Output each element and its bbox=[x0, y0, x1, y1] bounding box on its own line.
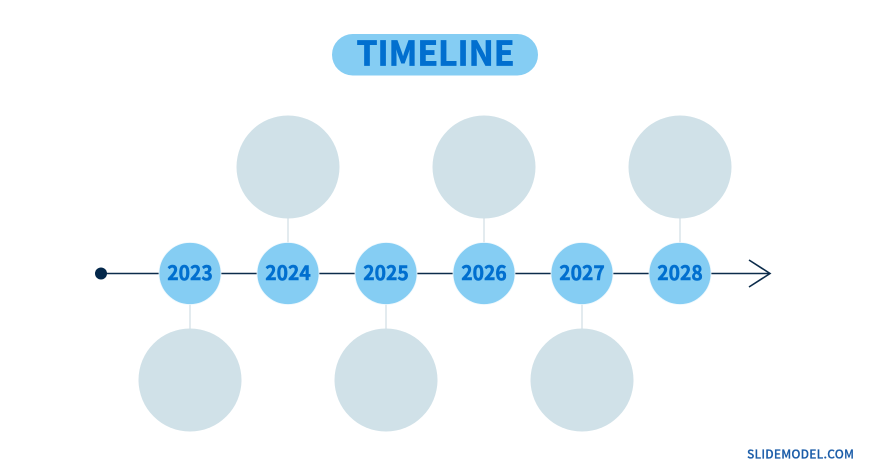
year node 2024 bbox=[257, 242, 319, 304]
placeholder circle 2028 bbox=[628, 116, 732, 218]
year node 2023: 2023 bbox=[167, 257, 213, 286]
title: TIMELINE bbox=[356, 26, 514, 76]
year node 2025 bbox=[355, 242, 417, 304]
placeholder circle 2024 bbox=[236, 116, 340, 218]
year node 2026 bbox=[453, 242, 515, 304]
year node 2026: 2026 bbox=[461, 257, 507, 286]
placeholder circle 2026 bbox=[432, 116, 536, 218]
placeholder circle 2023 bbox=[138, 328, 242, 432]
year node 2027 bbox=[551, 242, 613, 304]
timeline axis bbox=[95, 260, 770, 287]
connector stems bbox=[190, 212, 680, 335]
year node 2028: 2028 bbox=[657, 257, 703, 286]
placeholder circle 2025 bbox=[334, 328, 438, 432]
year node 2025: 2025 bbox=[363, 257, 409, 286]
year node 2028 bbox=[649, 242, 711, 304]
year node 2024: 2024 bbox=[265, 257, 311, 286]
brand credit: SLIDEMODEL.COM bbox=[747, 446, 854, 462]
year node 2027: 2027 bbox=[559, 257, 605, 286]
year node 2023 bbox=[159, 242, 221, 304]
placeholder circle 2027 bbox=[530, 328, 634, 432]
